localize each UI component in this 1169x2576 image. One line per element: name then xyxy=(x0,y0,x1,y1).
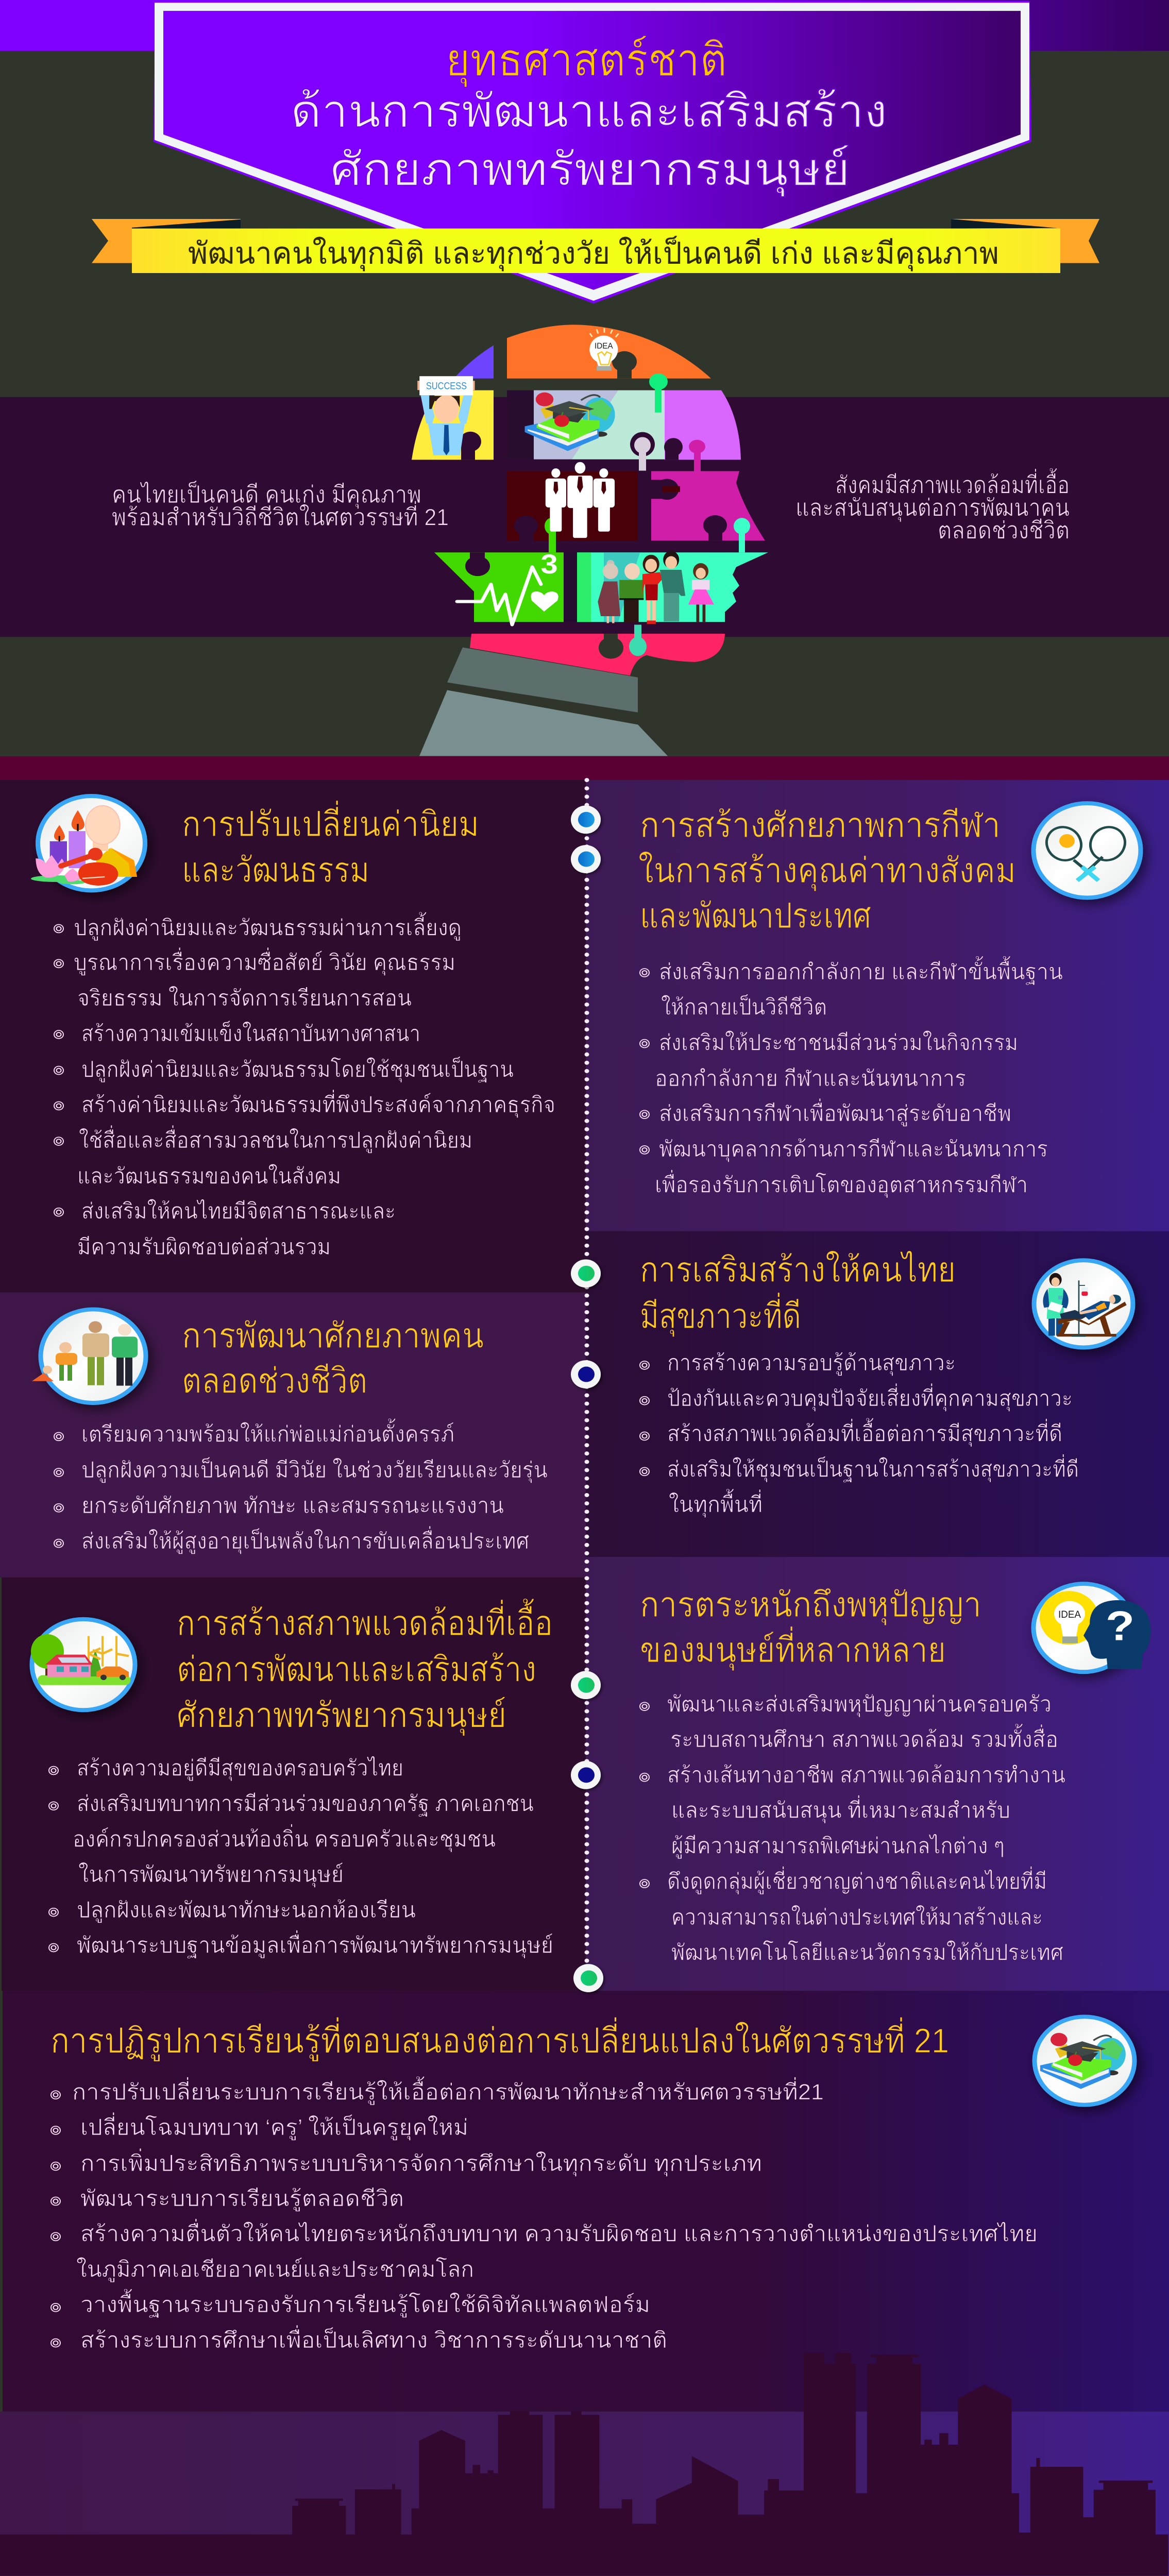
title line 2: ด้านการพัฒนาและเสริมสร้าง xyxy=(291,86,887,137)
puzzle: businessman with success sign: SUCCESS xyxy=(426,381,467,392)
left vision text: คนไทยเป็นคนดี คนเก่ง มีคุณภาพ xyxy=(112,480,421,509)
puzzle: green health piece xyxy=(434,549,564,625)
bullet list: พัฒนาระบบการเรียนรู้ตลอดชีวิต xyxy=(80,2186,404,2212)
bullet list: ส่งเสริมให้ชุมชนเป็นฐานในการสร้างสุขภาวะที่ดี xyxy=(667,1454,1079,1482)
icon: monk with candles xyxy=(31,796,145,890)
heading: การสร้างศักยภาพการกีฬา xyxy=(640,806,1001,844)
puzzle: magenta tab xyxy=(689,440,705,471)
bullet list: ในการพัฒนาทรัพยากรมนุษย์ xyxy=(78,1862,344,1888)
puzzle: green tab xyxy=(545,518,558,552)
head puzzle illustration xyxy=(412,325,768,756)
heading: การพัฒนาศักยภาพคน xyxy=(182,1317,484,1355)
bullet list: บูรณาการเรื่องความซื่อสัตย์ วินัย คุณธรรม xyxy=(74,947,455,976)
bullet list: ส่งเสริมบทบาทการมีส่วนร่วมของภาครัฐ ภาคเอกชน xyxy=(77,1791,534,1817)
panel: sports xyxy=(586,780,1169,1231)
panel: health xyxy=(586,1231,1169,1557)
bullet list: เตรียมความพร้อมให้แก่พ่อแม่ก่อนตั้งครรภ์ xyxy=(81,1418,454,1446)
bullet list: ปลูกฝังและพัฒนาทักษะนอกห้องเรียน xyxy=(77,1897,416,1923)
right vision text: ตลอดช่วงชีวิต xyxy=(938,518,1070,544)
puzzle: aqua tab xyxy=(734,518,750,552)
icon: nurse and patient xyxy=(1034,1260,1133,1348)
bullet list: องค์กรปกครองส่วนท้องถิ่น ครอบครัวและชุมชน xyxy=(73,1824,496,1852)
bullet list: ป้องกันและควบคุมปัจจัยเสี่ยงที่คุกคามสุขภาวะ xyxy=(667,1383,1073,1412)
heading: ตลอดช่วงชีวิต xyxy=(182,1362,367,1400)
bullet list: สร้างค่านิยมและวัฒนธรรมที่พึงประสงค์จากภาคธุรกิจ xyxy=(81,1090,555,1118)
bullet list: การปรับเปลี่ยนระบบการเรียนรู้ให้เอื้อต่อการพัฒนาทักษะสำหรับศตวรรษที่21 xyxy=(72,2076,824,2105)
heading xyxy=(640,1586,981,1671)
ribbon text: พัฒนาคนในทุกมิติ และทุกช่วงวัย ให้เป็นคนดี เก่ง และมีคุณภาพ xyxy=(188,235,999,271)
heading xyxy=(182,800,479,890)
heading: ต่อการพัฒนาและเสริมสร้าง xyxy=(177,1650,536,1689)
bullet list: ปลูกฝังความเป็นคนดี มีวินัย ในช่วงวัยเรียนและวัยรุ่น xyxy=(81,1457,548,1483)
bullet list xyxy=(54,912,555,1259)
bullet list: สร้างความตื่นตัวให้คนไทยตระหนักถึงบทบาท ความรับผิดชอบ และการวางตำแหน่งของประเทศไทย xyxy=(80,2218,1038,2246)
puzzle: dark red tile with business figures xyxy=(507,462,638,552)
heading: การเสริมสร้างให้คนไทย xyxy=(640,1250,956,1290)
bullet list: ผู้มีความสามารถพิเศษผ่านกลไกต่าง ๆ xyxy=(671,1834,1005,1859)
bullet list: การสร้างความรอบรู้ด้านสุขภาวะ xyxy=(667,1350,956,1376)
right vision text: และสนับสนุนต่อการพัฒนาคน xyxy=(795,495,1070,522)
timeline node: navy xyxy=(571,1761,601,1789)
bullet list: สร้างความเข้มแข็งในสถาบันทางศาสนา xyxy=(81,1021,420,1046)
icon: idea bulb and head: IDEA xyxy=(1058,1609,1081,1620)
puzzle: green tab xyxy=(649,374,668,413)
bullet list: การเพิ่มประสิทธิภาพระบบบริหารจัดการศึกษาในทุกระดับ ทุกประเภท xyxy=(80,2148,762,2177)
bullet list: และระบบสนับสนุน ที่เหมาะสมสำหรับ xyxy=(671,1795,1010,1823)
icon: education xyxy=(1035,2016,1134,2105)
bullet list: สร้างเส้นทางอาชีพ สภาพแวดล้อมการทำงาน xyxy=(667,1762,1065,1787)
heading: ศักยภาพทรัพยากรมนุษย์ xyxy=(177,1696,506,1736)
puzzle: violet piece xyxy=(454,345,494,379)
heading: ในการสร้างคุณค่าทางสังคม xyxy=(638,851,1016,891)
title shield xyxy=(154,1,1031,303)
bullet list: ให้กลายเป็นวิถีชีวิต xyxy=(661,994,827,1019)
heading: ของมนุษย์ที่หลากหลาย xyxy=(640,1626,946,1671)
bullet list: วางพื้นฐานระบบรองรับการเรียนรู้โดยใช้ดิจิทัลแพลตฟอร์ม xyxy=(80,2289,650,2318)
bullet list: พัฒนาและส่งเสริมพหุปัญญาผ่านครอบครัว xyxy=(667,1692,1052,1717)
heading xyxy=(638,806,1016,936)
heading xyxy=(177,1599,553,1736)
heading xyxy=(182,1317,484,1400)
title line 1: ยุทธศาสตร์ชาติ xyxy=(446,35,727,88)
bullet list: ส่งเสริมให้ผู้สูงอายุเป็นพลังในการขับเคลื่อนประเทศ xyxy=(81,1526,529,1554)
heading: การสร้างสภาพแวดล้อมที่เอื้อ xyxy=(177,1599,553,1643)
bullet list: เปลี่ยนโฉมบทบาท ‘ครู’ ให้เป็นครูยุคใหม่ xyxy=(80,2112,468,2141)
bullet list: ในทุกพื้นที่ xyxy=(669,1489,763,1518)
right vision text xyxy=(795,468,1070,544)
bullet list: พัฒนาระบบฐานข้อมูลเพื่อการพัฒนาทรัพยากรมนุษย์ xyxy=(77,1930,553,1958)
bullet list: และวัฒนธรรมของคนในสังคม xyxy=(77,1164,341,1189)
heading: และพัฒนาประเทศ xyxy=(640,897,871,936)
heading: และวัฒนธรรม xyxy=(182,851,369,890)
puzzle: orange piece with light bulb xyxy=(507,325,711,379)
bullet list: เพื่อรองรับการเติบโตของอุตสาหกรรมกีฬา xyxy=(655,1170,1028,1198)
timeline node: blue xyxy=(571,805,601,834)
bullet list: ยกระดับศักยภาพ ทักษะ และสมรรถนะแรงงาน xyxy=(81,1493,504,1518)
maroon divider strip xyxy=(0,756,1169,780)
bullet list xyxy=(51,2076,1038,2352)
middle purple band xyxy=(0,397,1169,637)
left vision text: พร้อมสำหรับวิถีชีวิตในศตวรรษที่ 21 xyxy=(112,501,449,531)
ribbon banner xyxy=(92,219,1099,273)
heading: การปรับเปลี่ยนค่านิยม xyxy=(182,800,479,844)
bullet list: จริยธรรม ในการจัดการเรียนการสอน xyxy=(77,986,412,1010)
bullet list: พัฒนาเทคโนโลยีและนวัตกรรมให้กับประเทศ xyxy=(671,1940,1063,1965)
panel: learning reform xyxy=(3,1991,1169,2412)
collar lower band xyxy=(419,690,668,756)
bullet list: สร้างระบบการศึกษาเพื่อเป็นเลิศทาง วิชาการระดับนานาชาติ xyxy=(80,2325,667,2352)
puzzle: businessman with success sign xyxy=(417,376,475,455)
footer band xyxy=(0,2412,1169,2576)
bullet list xyxy=(640,1350,1079,1518)
bullet list xyxy=(640,1692,1065,1965)
timeline node: green xyxy=(571,1259,601,1287)
timeline node: blue xyxy=(571,845,601,873)
bullet list: ความสามารถในต่างประเทศให้มาสร้างและ xyxy=(671,1905,1043,1929)
bullet list: ออกกำลังกาย กีฬาและนันทนาการ xyxy=(655,1066,966,1091)
bullet list: ส่งเสริมการออกกำลังกาย และกีฬาขั้นพื้นฐาน xyxy=(659,956,1063,985)
bullet list xyxy=(640,956,1063,1198)
timeline dotted line xyxy=(584,780,589,1974)
panel: lifelong potential xyxy=(0,1293,586,1578)
heading xyxy=(640,1250,956,1337)
bullet list: ปลูกฝังค่านิยมและวัฒนธรรมผ่านการเลี้ยงดู xyxy=(74,912,462,941)
bullet list: สร้างสภาพแวดล้อมที่เอื้อต่อการมีสุขภาวะที่ดี xyxy=(667,1418,1062,1447)
puzzle: yellow piece xyxy=(412,390,494,460)
timeline node: green xyxy=(571,1671,601,1699)
puzzle: education tile xyxy=(507,390,665,471)
icon: tennis rackets xyxy=(1034,803,1141,898)
heading: การปฏิรูปการเรียนรู้ที่ตอบสนองต่อการเปลี่ยนแปลงในศัตวรรษที่ 21 xyxy=(50,2017,949,2062)
puzzle: magenta piece xyxy=(651,471,765,540)
puzzle: pink neck piece xyxy=(470,634,725,675)
bullet list: ส่งเสริมให้ประชาชนมีส่วนร่วมในกิจกรรม xyxy=(659,1030,1018,1055)
title line 3: ศักยภาพทรัพยากรมนุษย์ xyxy=(330,144,850,197)
puzzle: aqua tab xyxy=(629,625,647,656)
collar upper band xyxy=(447,648,638,713)
city skyline xyxy=(0,2353,1168,2576)
bullet list: สร้างความอยู่ดีมีสุขของครอบครัวไทย xyxy=(77,1756,403,1781)
bullet list: ดึงดูดกลุ่มผู้เชี่ยวชาญต่างชาติและคนไทยที่มี xyxy=(667,1866,1047,1894)
bullet list: ปลูกฝังค่านิยมและวัฒนธรรมโดยใช้ชุมชนเป็นฐาน xyxy=(81,1057,514,1082)
bullet list: ใช้สื่อและสื่อสารมวลชนในการปลูกฝังค่านิยม xyxy=(79,1125,472,1154)
bullet list: ระบบสถานศึกษา สภาพแวดล้อม รวมทั้งสื่อ xyxy=(670,1724,1058,1752)
left vision text xyxy=(112,480,449,531)
bullet list: พัฒนาบุคลากรด้านการกีฬาและนันทนาการ xyxy=(659,1137,1048,1162)
puzzle: aqua family piece xyxy=(564,551,768,624)
bullet list: ส่งเสริมการกีฬาเพื่อพัฒนาสู่ระดับอาชีพ xyxy=(659,1098,1011,1127)
right vision text: สังคมมีสภาพแวดล้อมที่เอื้อ xyxy=(835,468,1070,498)
puzzle: lilac piece xyxy=(664,390,741,460)
bullet list xyxy=(49,1756,553,1958)
icon: family generations xyxy=(32,1309,146,1403)
icon: idea bulb and head: ? xyxy=(1106,1602,1134,1649)
top gradient band xyxy=(0,0,1169,51)
heading: การตระหนักถึงพหุปัญญา xyxy=(640,1586,981,1625)
puzzle: green health piece: 3 xyxy=(540,549,558,579)
bullet list: ส่งเสริมให้คนไทยมีจิตสาธารณะและ xyxy=(81,1199,396,1223)
panel: supportive environment xyxy=(2,1578,586,1991)
heading: มีสุขภาวะที่ดี xyxy=(640,1292,801,1337)
panel: values and culture xyxy=(0,780,586,1293)
puzzle: orange piece with light bulb: IDEA xyxy=(595,342,613,351)
bullet list: ในภูมิภาคเอเชียอาคเนย์และประชาคมโลก xyxy=(76,2257,474,2282)
timeline node: navy xyxy=(571,1360,601,1388)
bullet list xyxy=(54,1418,548,1554)
bullet list: มีความรับผิดชอบต่อส่วนรวม xyxy=(77,1234,331,1259)
timeline node: green xyxy=(573,1964,603,1992)
icon: idea bulb and head xyxy=(1034,1584,1150,1672)
icon: green house xyxy=(31,1619,135,1710)
panel: multiple intelligences xyxy=(586,1557,1169,1991)
